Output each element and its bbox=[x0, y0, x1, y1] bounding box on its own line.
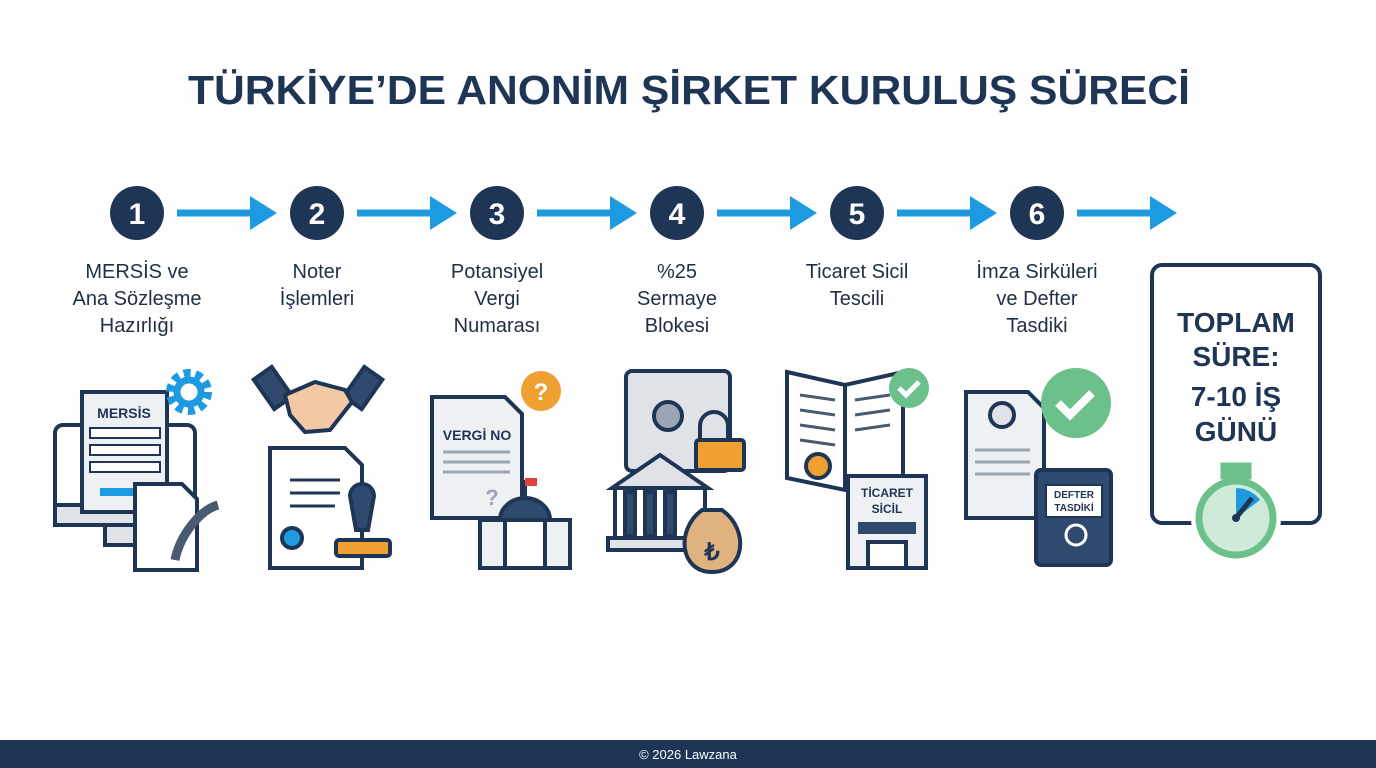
icon: vault, bank, money bag: ₺ bbox=[703, 539, 720, 566]
icon: signature circular and ledger bbox=[966, 368, 1111, 565]
step labels: MERSİS ve bbox=[85, 260, 189, 283]
icon: MERSIS computer: MERSİS bbox=[97, 405, 151, 421]
step labels: Potansiyel bbox=[451, 261, 543, 283]
icon: trade registry book and building bbox=[787, 368, 929, 568]
icon: tax number document and building: VERGİ NO bbox=[443, 427, 511, 443]
step numbers and arrows: 2 bbox=[309, 198, 325, 231]
step numbers and arrows: 6 bbox=[1029, 198, 1045, 231]
title: TÜRKİYE’DE ANONİM ŞİRKET KURULUŞ SÜRECİ bbox=[188, 67, 1190, 113]
total duration box: GÜNÜ bbox=[1195, 416, 1277, 447]
step labels: Blokesi bbox=[645, 315, 709, 337]
icon: signature circular and ledger: TASDİKİ bbox=[1054, 501, 1094, 514]
step labels: ve Defter bbox=[996, 288, 1078, 310]
icon: tax number document and building: ? bbox=[485, 485, 499, 510]
step labels: Ana Sözleşme bbox=[73, 288, 201, 310]
step labels: İşlemleri bbox=[280, 287, 354, 310]
total duration box: TOPLAM bbox=[1177, 307, 1295, 338]
icon: tax number document and building: ? bbox=[534, 379, 548, 406]
footer: © 2026 Lawzana bbox=[639, 747, 738, 762]
icon: trade registry book and building: TİCARET bbox=[861, 485, 914, 500]
icon: vault, bank, money bag bbox=[608, 371, 744, 572]
step labels: Tasdiki bbox=[1006, 315, 1068, 337]
step numbers and arrows: 5 bbox=[849, 198, 865, 231]
step numbers and arrows: 3 bbox=[489, 198, 505, 231]
step numbers and arrows: 4 bbox=[669, 198, 686, 231]
step numbers and arrows: 1 bbox=[129, 198, 145, 231]
icon: tax number document and building bbox=[432, 371, 570, 568]
footer bbox=[0, 740, 1376, 768]
step labels: İmza Sirküleri bbox=[976, 260, 1098, 283]
step numbers and arrows bbox=[110, 186, 1177, 240]
step labels: Numarası bbox=[454, 315, 540, 337]
step labels bbox=[73, 260, 1098, 337]
icon: notary handshake and stamp bbox=[254, 367, 390, 568]
step labels: %25 bbox=[657, 261, 697, 283]
icon: trade registry book and building: SİCİL bbox=[872, 501, 902, 516]
total duration box bbox=[1152, 265, 1320, 563]
total duration box: SÜRE: bbox=[1192, 341, 1280, 372]
step labels: Vergi bbox=[474, 288, 520, 310]
step labels: Tescili bbox=[830, 288, 884, 310]
icon: stopwatch bbox=[1191, 466, 1281, 563]
step labels: Hazırlığı bbox=[100, 315, 174, 337]
icon: signature circular and ledger: DEFTER bbox=[1054, 490, 1095, 501]
step labels: Ticaret Sicil bbox=[806, 261, 908, 283]
icon: MERSIS computer bbox=[55, 373, 218, 570]
total duration box: 7-10 İŞ bbox=[1191, 381, 1281, 412]
step labels: Noter bbox=[293, 261, 342, 283]
step labels: Sermaye bbox=[637, 288, 717, 310]
